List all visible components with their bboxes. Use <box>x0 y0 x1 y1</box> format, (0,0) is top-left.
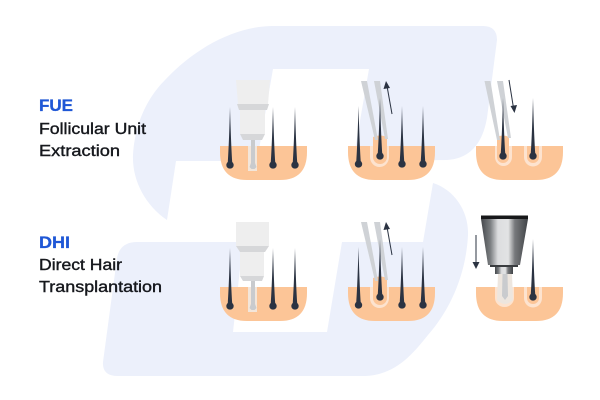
title: DHI <box>39 234 162 296</box>
panel: FUE step 1 <box>220 80 307 180</box>
title: FUE: Extraction <box>39 143 120 160</box>
panel: FUE step 2 <box>348 81 435 180</box>
skin <box>348 287 435 321</box>
arrow down <box>472 235 480 269</box>
title: DHI: Direct Hair <box>39 257 123 274</box>
skin <box>476 287 563 321</box>
panel: DHI step 2 <box>348 222 435 321</box>
follicle <box>370 146 389 167</box>
skin <box>220 287 307 321</box>
punch tool <box>236 222 269 312</box>
hair <box>529 239 537 301</box>
hairs <box>226 107 299 169</box>
arrow up <box>384 222 392 255</box>
punch tool <box>236 80 270 171</box>
skin <box>220 146 307 180</box>
arrow up <box>384 81 392 114</box>
tweezers <box>361 222 388 281</box>
background logo: upper shape <box>133 26 497 220</box>
title: DHI: Transplantation <box>39 279 162 296</box>
title: FUE: FUE <box>39 97 73 115</box>
title: FUE: Follicular Unit <box>39 121 147 138</box>
tweezers <box>361 81 388 140</box>
implanter tool <box>481 216 528 304</box>
panel: FUE step 3 <box>476 80 563 180</box>
hairs <box>226 248 299 310</box>
tweezers <box>484 81 511 140</box>
follicle <box>370 287 389 308</box>
title: FUE <box>39 97 147 160</box>
skin <box>476 146 563 180</box>
hairs <box>355 98 427 168</box>
panel: DHI step 1 <box>220 222 307 321</box>
hairs <box>499 98 537 160</box>
background logo: lower shape <box>103 183 468 376</box>
skin <box>348 146 435 180</box>
arrow down <box>509 80 517 113</box>
follicles <box>495 146 512 166</box>
follicles <box>495 287 514 307</box>
title: DHI: DHI <box>39 234 70 252</box>
panel: DHI step 3 <box>472 216 563 321</box>
hairs <box>355 239 427 309</box>
